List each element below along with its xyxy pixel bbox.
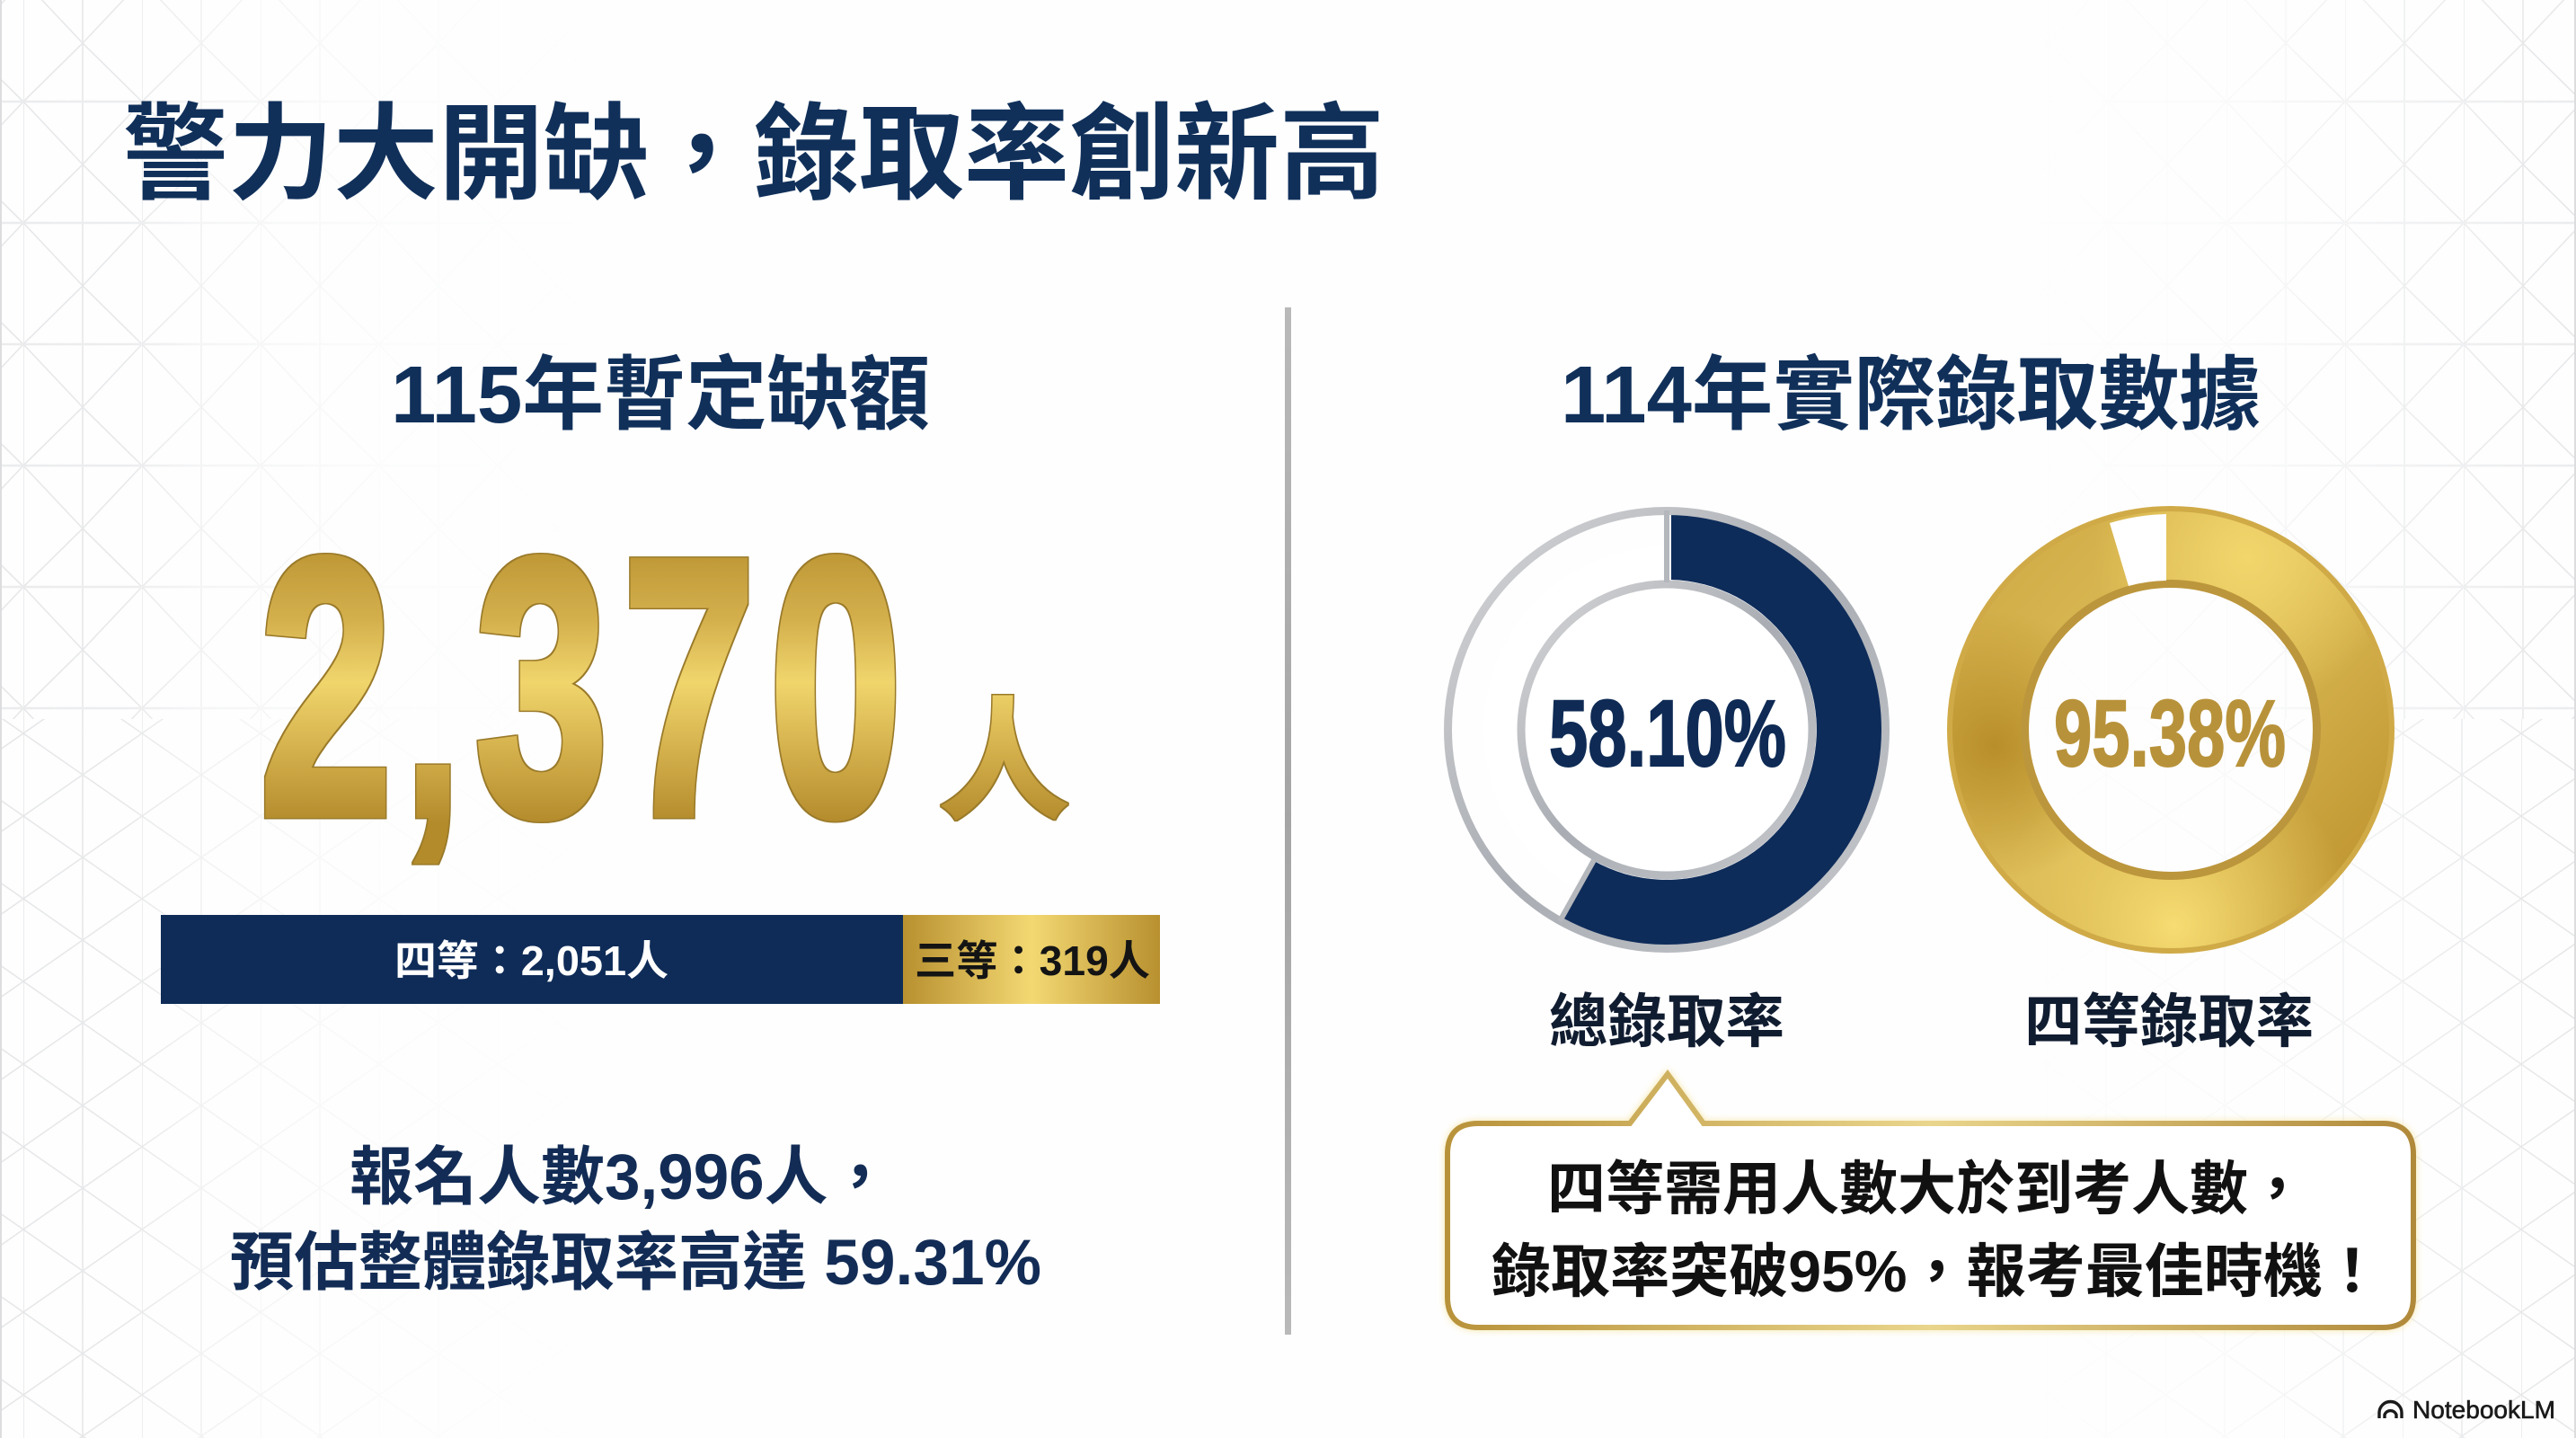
label: grade 4 admission rate: 四等錄取率 bbox=[2024, 989, 2314, 1054]
bar segment: grade 4: 四等：2,051人 bbox=[394, 937, 668, 984]
big number: 2,370 people: 3 bbox=[475, 483, 607, 892]
text block: applicants and estimated admission rate bbox=[230, 1142, 1041, 1299]
big number: 2,370 people: 人 bbox=[940, 689, 1068, 835]
callout bbox=[1447, 1074, 2413, 1327]
donut chart: grade 4 admission rate 95.38% bbox=[1950, 509, 2392, 951]
big number: 2,370 people: , bbox=[406, 545, 459, 876]
bar segment: grade 4 bbox=[161, 915, 903, 1004]
icon: NotebookLM logo bbox=[2379, 1401, 2402, 1418]
callout: 錄取率突破95%，報考最佳時機！ bbox=[1492, 1238, 2382, 1304]
label: total admission rate: 總錄取率 bbox=[1549, 989, 1784, 1054]
heading: 114 admission data: 114年實際錄取數據 bbox=[1561, 351, 2261, 440]
text block: applicants and estimated admission rate: 預估整體錄取率高達 59.31% bbox=[230, 1228, 1041, 1299]
panel: 115 vacancies bbox=[161, 351, 1160, 1299]
donut chart: total admission rate 58.10%: 58.10% bbox=[1549, 681, 1786, 786]
title: 警力大開缺，錄取率創新高 bbox=[123, 95, 1385, 213]
bar segment: grade 3: 三等：319人 bbox=[915, 937, 1150, 984]
vertical divider bbox=[1285, 307, 1291, 1335]
big number: 2,370 people: 7 bbox=[624, 483, 755, 892]
bar segment: grade 3 bbox=[903, 915, 1160, 1004]
stacked bar: grade 4 and grade 3 vacancies bbox=[161, 915, 1160, 1004]
heading: 115 vacancies: 115年暫定缺額 bbox=[391, 351, 930, 440]
donut chart: total admission rate 58.10% bbox=[1448, 510, 1885, 949]
callout: 四等需用人數大於到考人數， bbox=[1547, 1156, 2306, 1221]
panel: 114 admission data bbox=[1447, 351, 2413, 1327]
big number: 2,370 people: 0 bbox=[770, 483, 901, 892]
donut chart: grade 4 admission rate 95.38%: 95.38% bbox=[2054, 681, 2286, 786]
NotebookLM watermark: NotebookLM bbox=[2412, 1396, 2555, 1424]
text block: applicants and estimated admission rate: 報名人數3,996人， bbox=[350, 1142, 892, 1213]
big number: 2,370 people bbox=[261, 483, 1068, 892]
big number: 2,370 people: 2 bbox=[261, 483, 392, 892]
